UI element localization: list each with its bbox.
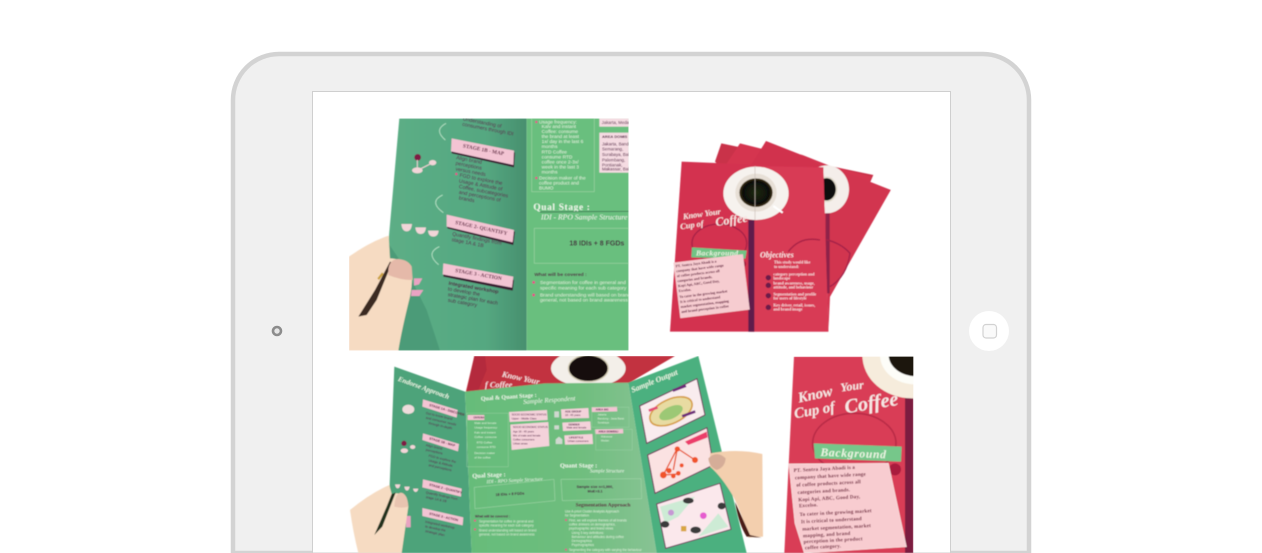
right panel text: Usage frequency: [539, 119, 577, 125]
criteria boxes: Male and female [567, 426, 587, 430]
left stages: STAGE 3 - ACTION [429, 512, 459, 522]
cover title behind: Know Your [500, 370, 541, 387]
middle panel [465, 383, 657, 553]
background tag [814, 443, 902, 462]
right panel text: 1x/ day in the last 6 [542, 139, 584, 145]
qual stage: 18 IDIs + 8 FGDs [496, 491, 524, 497]
left stages: strategic plan [425, 529, 445, 537]
background tag: Background [819, 446, 887, 461]
stage 1B text [455, 116, 514, 204]
covered text: What will be covered : [534, 272, 587, 278]
criteria boxes: Urban areas [513, 442, 528, 446]
left stages: stage 1A & 1B [425, 495, 448, 504]
background note: PT. Sentra Jaya Abadi is a [675, 259, 717, 268]
sample output 3 [657, 483, 731, 548]
icon: network map [412, 154, 436, 173]
left stages: Align brand [425, 443, 443, 451]
right panel text: BUMO [539, 185, 554, 191]
objectives: for users of lifestyle [773, 295, 807, 300]
stage 3 text: Integrated workshop [448, 281, 499, 295]
left stages: FGD to explore the [428, 454, 457, 464]
background note: categories and brands. [797, 487, 851, 496]
covered text: general, not based on brand awareness [540, 298, 628, 304]
background note: To cater in the growing market [679, 289, 728, 299]
criteria boxes: Surabaya [598, 420, 610, 424]
right panel text: coffee product and [539, 180, 579, 186]
criteria boxes: SOCIO ECONOMIC STATUS [512, 412, 547, 416]
stage 1B label [451, 138, 515, 167]
criteria boxes: CRITERIA [473, 416, 485, 419]
back brochures [715, 141, 891, 332]
background note: categories and brands. [677, 275, 713, 283]
front stain [692, 224, 820, 263]
photo: stack of red brochures [670, 141, 891, 332]
front brochure [670, 162, 828, 332]
icon: home button [969, 311, 1009, 351]
criteria boxes: SOCIO ECONOMIC STATUS [513, 425, 548, 429]
middle heading: Qual & Quant Stage : [481, 393, 537, 403]
background note: perception in the product [803, 536, 863, 545]
area boxes: Jakarta, Medan [602, 120, 632, 125]
left stages: to develop the [425, 524, 446, 533]
criteria boxes: Makassar [601, 434, 613, 438]
photo: cover close-up [784, 356, 914, 553]
background note: Excelso. [678, 288, 692, 293]
left stages: and perceptions [428, 463, 452, 472]
criteria boxes: Bandung - Jawa Barat [598, 416, 624, 420]
covered text: Segmentation for coffee in general and [540, 280, 626, 286]
stage 1B text: versus needs [455, 166, 487, 178]
background note: company that have wide range [676, 263, 724, 273]
stage 3 label: STAGE 3 - ACTION [455, 268, 502, 282]
criteria boxes: AREA DOMISILI [598, 429, 619, 433]
area boxes [598, 118, 629, 174]
criteria boxes: Kalv and instant [474, 430, 496, 434]
background note: PT. Sentra Jaya Abadi is a [793, 465, 856, 474]
quant stage: Sample Structure [590, 470, 625, 475]
criteria boxes: consume RTD [477, 445, 497, 449]
criteria boxes: 18 - 45 years [565, 413, 581, 417]
tablet frame [233, 54, 1029, 553]
stain drip [889, 463, 901, 475]
background note: and brand perception in coffee [681, 304, 729, 314]
back stain [788, 237, 850, 287]
cup [862, 312, 961, 398]
left heading: Endorse Approach [396, 375, 450, 401]
left stages: Integrated workshop [425, 520, 455, 530]
title: Cup of [680, 219, 705, 231]
red cover [784, 357, 913, 553]
objectives [760, 250, 816, 312]
background note: Kopi Api, ABC, Good Day, [678, 279, 720, 288]
background note: company that have wide range [795, 472, 867, 481]
criteria boxes: GENDER [568, 422, 580, 426]
background note: It is critical to understand [680, 295, 721, 304]
criteria boxes: Coffee: consume [474, 435, 497, 439]
criteria boxes: Male and female [474, 421, 497, 425]
segmentation: Segmentation Approach [576, 503, 631, 509]
criteria boxes: Medan [601, 438, 610, 442]
photo: open brochure held in both hands [350, 350, 763, 553]
what will be covered: Segmentation for coffee in general and [479, 520, 534, 524]
what will be covered: general, not based on brand awareness [479, 532, 535, 536]
qual stage [472, 471, 555, 509]
segmentation: Use A-priori Cluster Analysis Approach [565, 510, 619, 514]
objectives: to understand: [774, 264, 799, 269]
left stages: STAGE 1A - DISCOVER [429, 403, 466, 417]
criteria boxes [467, 407, 632, 467]
right panel text: Coffee: consume [542, 129, 578, 135]
left stages: and consumer needs [425, 416, 457, 427]
covered text: specific meaning for each sub category [540, 286, 627, 292]
criteria boxes: Coffee consumers [513, 438, 535, 442]
criteria boxes: Urban consumers [568, 439, 589, 443]
sample output 1 [640, 379, 705, 443]
stage 1B label: STAGE 1B - MAP [462, 143, 505, 157]
objectives: brand awareness, usage, [773, 280, 815, 285]
segmentation [565, 503, 642, 552]
segmentation: Behaviour and attitudes during coffee [572, 535, 624, 539]
title: Know [796, 384, 834, 407]
stage 2 label [447, 215, 515, 245]
left hand [350, 485, 408, 553]
stage 3 text: to develop the [447, 286, 480, 298]
icon: camera [273, 327, 281, 335]
stage 1B text: Align brand [456, 155, 482, 166]
objectives: Segmentation and profile [773, 291, 816, 296]
segmentation: First, we will explore themes of all brands [569, 518, 627, 522]
what will be covered: Brand understanding will based on brand [479, 528, 537, 532]
cup behind [550, 356, 626, 384]
background note: mapping, and brand [803, 531, 851, 539]
right panel [628, 356, 747, 553]
title: Coffee [843, 388, 900, 418]
right panel text: week in the last 3 [542, 165, 579, 171]
right panel text: RTD Coffee [542, 150, 567, 156]
quant stage: Sample size n=1,000, [577, 485, 613, 489]
background note: market segmentation, mapping [680, 299, 729, 309]
qual stage: Qual Stage : [472, 471, 506, 480]
middle heading [481, 393, 576, 406]
idi box: 18 IDIs + 8 FGDs [569, 240, 624, 247]
what will be covered: specific meaning for each sub category [479, 524, 534, 528]
objectives: This study would like [774, 259, 811, 264]
background note: of coffee products across all [677, 269, 720, 278]
what will be covered: What will be covered : [475, 514, 510, 518]
title: Know Your [681, 207, 722, 221]
objectives: and brand image [773, 307, 803, 312]
area boxes: Palembang, [602, 157, 625, 162]
covered text: Brand understanding will based on brand in [540, 292, 636, 298]
stage 3 text: strategic plan for each [447, 292, 498, 307]
left stages: STAGE 1B - MAP [429, 436, 456, 448]
segmentation: Demographics [572, 539, 592, 543]
stage 1B text: Coffee, subcategories [458, 184, 509, 200]
stage 1B text: brands [458, 195, 475, 204]
segmentation: Using 5 key definitions: [572, 531, 604, 535]
quant stage: MoE=3.1 [588, 490, 603, 494]
middle heading: Sample Respondent [523, 395, 576, 406]
title: Cup of [793, 399, 838, 422]
area boxes: AREA DOMIS [602, 134, 628, 139]
area boxes: Jakarta, Bandung [602, 141, 637, 146]
hand [349, 236, 423, 351]
criteria boxes: Age 18 - 45 years [513, 430, 535, 434]
background note [673, 254, 750, 318]
stage 3 text: sub category [447, 298, 478, 309]
objectives: Key driver, retail, issues, [773, 303, 815, 308]
stage 2 text: stage 1A & 1B [451, 237, 485, 249]
quant stage [560, 462, 642, 501]
title [680, 207, 749, 231]
background note: Excelso. [799, 502, 819, 509]
qual stage: IDI - RPO Sample Structure [486, 477, 544, 485]
back cup [804, 165, 849, 293]
stage 1B text: and perceptions of [458, 190, 502, 204]
what will be covered [474, 514, 537, 536]
stage 3 label [443, 263, 514, 291]
coffee stain [813, 413, 896, 473]
left stages: Usage & Attitude [428, 458, 453, 468]
area boxes: Pontianak, [602, 163, 622, 168]
qual stage heading: Qual Stage : [533, 203, 591, 213]
left stages: perceptions [425, 448, 443, 456]
right panel text: consume RTD [542, 155, 573, 161]
right panel text: months [542, 144, 558, 150]
background note: To cater in the growing market [799, 508, 872, 518]
criteria boxes: RTD Coffee [477, 440, 493, 444]
right panel text [532, 118, 594, 192]
objectives: Objectives [760, 250, 794, 259]
criteria boxes: Decision maker [474, 451, 495, 455]
right panel text: coffee once 2-3x/ [542, 160, 579, 166]
segmentation: coffee drinkers on demographics, [569, 522, 616, 526]
stage 2 text: Quantify findings from [452, 231, 502, 247]
arrows [432, 123, 446, 265]
front cup [723, 166, 789, 220]
stain drip [739, 261, 746, 267]
right panel text: months [542, 170, 558, 176]
quant stage: Quant Stage : [560, 462, 597, 469]
stage 2 label: STAGE 2- QUANTIFY [455, 220, 508, 237]
criteria boxes: Jakarta [598, 412, 607, 416]
red brochures behind [466, 356, 675, 393]
objectives: category perception and [773, 271, 815, 276]
criteria boxes: AGE GROUP [565, 410, 581, 414]
title: Coffee [714, 211, 749, 229]
background note: It is critical to understand [801, 516, 862, 525]
area boxes: Semarang, [602, 147, 623, 152]
covered text [532, 272, 636, 304]
left panel [389, 367, 472, 553]
segmentation: Segmenting the category with varying the behaviour [569, 548, 642, 552]
objectives: attitude, and behaviour [773, 285, 814, 290]
left stages [395, 399, 466, 537]
stage 1B text: perceptions [455, 161, 483, 172]
area boxes: Makassar, Bali [602, 167, 630, 172]
left stages: through in-depth [428, 421, 453, 430]
background note: Kopi Api, ABC, Good Day, [798, 494, 861, 503]
dark stripe [905, 397, 913, 553]
objectives: landscape [773, 275, 790, 280]
right hand [708, 451, 763, 538]
cover title behind: f Coffee [485, 380, 513, 389]
criteria boxes: Mix of male and female [513, 434, 541, 438]
segmentation: for Segmentation [565, 514, 589, 518]
stage 3 text [447, 281, 499, 309]
qual stage heading [533, 203, 629, 221]
left stages: STAGE 2 - QUANTIFY [429, 483, 463, 495]
stage 1B text: Usage & Attitude of [458, 178, 503, 193]
background note: of coffee products across all [796, 479, 861, 489]
photo: brochure inner pages held in hand [349, 116, 637, 351]
stage 1B text: consumers through IDI [462, 122, 514, 138]
qual stage heading: IDI - RPO Sample Structure [540, 212, 628, 221]
area boxes: Surabaya, Bali [602, 152, 630, 157]
icon: cups [401, 224, 439, 237]
stage 1B text: FGD to explore the [459, 173, 503, 187]
right panel text: the brand at least [542, 134, 580, 140]
title [793, 377, 900, 422]
title: Your [839, 377, 865, 395]
right panel text: Decision maker of the [539, 175, 586, 181]
criteria boxes: of the coffee [474, 456, 491, 460]
left stages: Quantify findings from [425, 490, 458, 501]
segmentation: psychographic and brand views [569, 526, 614, 530]
bullets [766, 275, 771, 310]
background note: market segmentation, market [802, 523, 871, 533]
criteria boxes: LIFESTYLE [569, 436, 584, 440]
stage 1B text: Understanding of [462, 116, 503, 130]
criteria boxes: Usage frequency: [474, 426, 498, 430]
background note: coffee category. [805, 543, 842, 551]
idi box [534, 228, 634, 263]
right heading: Sample Output [630, 367, 680, 395]
right panel text: Kalv and instant [542, 124, 577, 130]
cover title behind [485, 370, 541, 389]
left stages: Get to know brand [425, 411, 453, 421]
background note [789, 463, 906, 553]
background tag: Background [695, 249, 738, 258]
criteria boxes: Upper - Middle Class [512, 416, 537, 420]
sample output 2 [648, 428, 713, 493]
segmentation: Psychographics [572, 543, 594, 547]
background tag [691, 247, 747, 259]
criteria boxes: AREA BIG [596, 407, 609, 411]
tablet screen [312, 92, 950, 553]
